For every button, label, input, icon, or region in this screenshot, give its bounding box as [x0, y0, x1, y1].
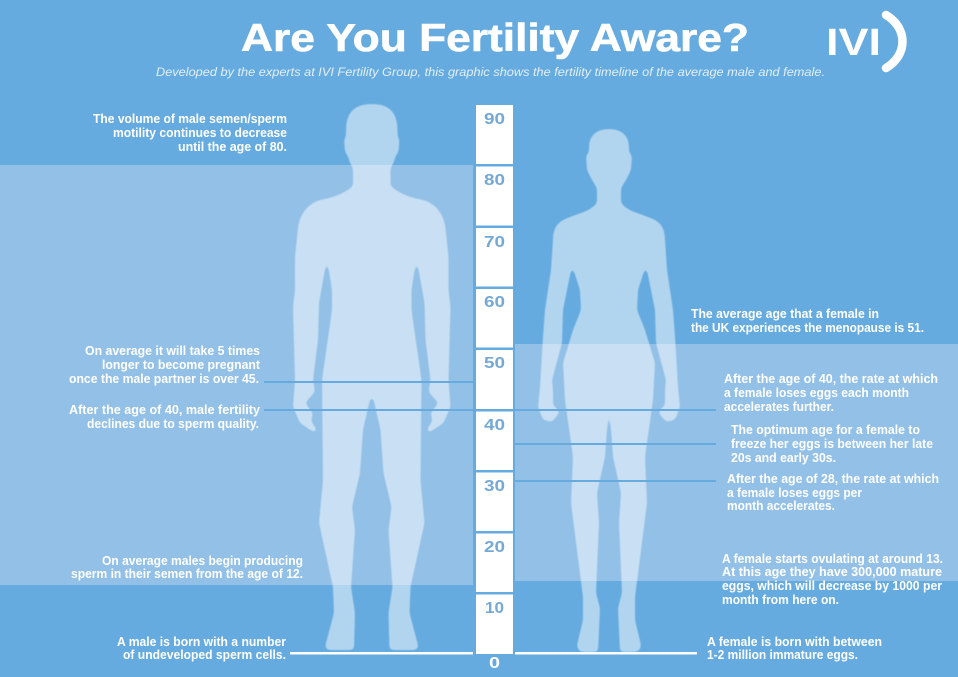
text: male birth [117, 635, 286, 662]
male connector lines [264, 381, 476, 654]
text: female after 28: a female loses eggs per [727, 486, 862, 500]
text: ovulation: At this age they have 300,000 mature [722, 565, 942, 579]
text: male birth: of undeveloped sperm cells. [123, 648, 286, 662]
male silhouette [293, 104, 450, 650]
logo: IVI: IVI [826, 22, 881, 64]
text: ovulation: A female starts ovulating at around 13. [722, 552, 943, 566]
age ruler: 10 [485, 600, 504, 617]
female fertile age band [515, 344, 958, 581]
text: egg freezing: The optimum age for a female to [731, 423, 920, 437]
text: male age 12 [71, 554, 303, 581]
text: female after 40: accelerates further. [724, 400, 834, 414]
text: female after 40: After the age of 40, the rate at which [724, 372, 938, 386]
text: female after 28: month accelerates. [727, 499, 835, 513]
subtitle: Developed by the experts at IVI Fertility Group, this graphic shows the fertility timeline of the average male and female. [156, 67, 825, 79]
text: ovulation [722, 552, 943, 607]
text: male motility: motility continues to decrease [113, 126, 287, 140]
text: male age 12: sperm in their semen from the age of 12. [71, 567, 303, 581]
age ruler: 40 [484, 417, 505, 434]
text: female birth [707, 635, 882, 662]
text: egg freezing: freeze her eggs is between her late [731, 437, 933, 451]
age ruler: 90 [484, 111, 505, 128]
text: egg freezing [731, 423, 933, 465]
text: male over 45 [69, 344, 261, 386]
age ruler: 70 [484, 234, 505, 251]
male fertile age band [0, 165, 473, 585]
age ruler: 20 [484, 539, 505, 556]
text: female after 40 [724, 372, 938, 414]
text: egg freezing: 20s and early 30s. [731, 451, 836, 465]
female silhouette [538, 129, 680, 652]
text: male over 45: longer to become pregnant [102, 358, 261, 372]
text: female after 28: After the age of 28, the rate at which [727, 472, 939, 486]
text: menopause [691, 307, 924, 335]
logo: IVI [826, 15, 902, 68]
age ruler: 60 [484, 294, 505, 311]
text: female birth: 1-2 million immature eggs. [707, 648, 858, 662]
text: male motility: The volume of male semen/sperm [93, 112, 287, 126]
age ruler: 0 [489, 655, 500, 672]
text: male motility: until the age of 80. [178, 140, 287, 154]
title: Are You Fertility Aware? [241, 17, 749, 60]
age ruler [476, 105, 513, 672]
text: male after 40: After the age of 40, male fertility [69, 403, 260, 417]
text: ovulation: eggs, which will decrease by 1000 per [722, 579, 942, 593]
text: male age 12: On average males begin producing [102, 554, 303, 568]
text: male motility [93, 112, 287, 154]
text: female birth: A female is born with between [707, 635, 882, 649]
text: menopause: The average age that a female in [691, 307, 879, 321]
text: male over 45: On average it will take 5 times [85, 344, 260, 358]
text: male birth: A male is born with a number [117, 635, 286, 649]
age ruler: 30 [484, 478, 505, 495]
text: male after 40: declines due to sperm quality. [87, 417, 259, 431]
age ruler: 80 [484, 172, 505, 189]
text: female after 28 [727, 472, 939, 513]
age ruler: 50 [484, 355, 505, 372]
text: menopause: the UK experiences the menopause is 51. [691, 321, 924, 335]
text: male over 45: once the male partner is over 45. [69, 372, 259, 386]
female connector lines [513, 409, 716, 654]
text: male after 40 [69, 403, 260, 431]
text: ovulation: month from here on. [722, 593, 839, 607]
text: female after 40: a female loses eggs each month [724, 386, 909, 400]
